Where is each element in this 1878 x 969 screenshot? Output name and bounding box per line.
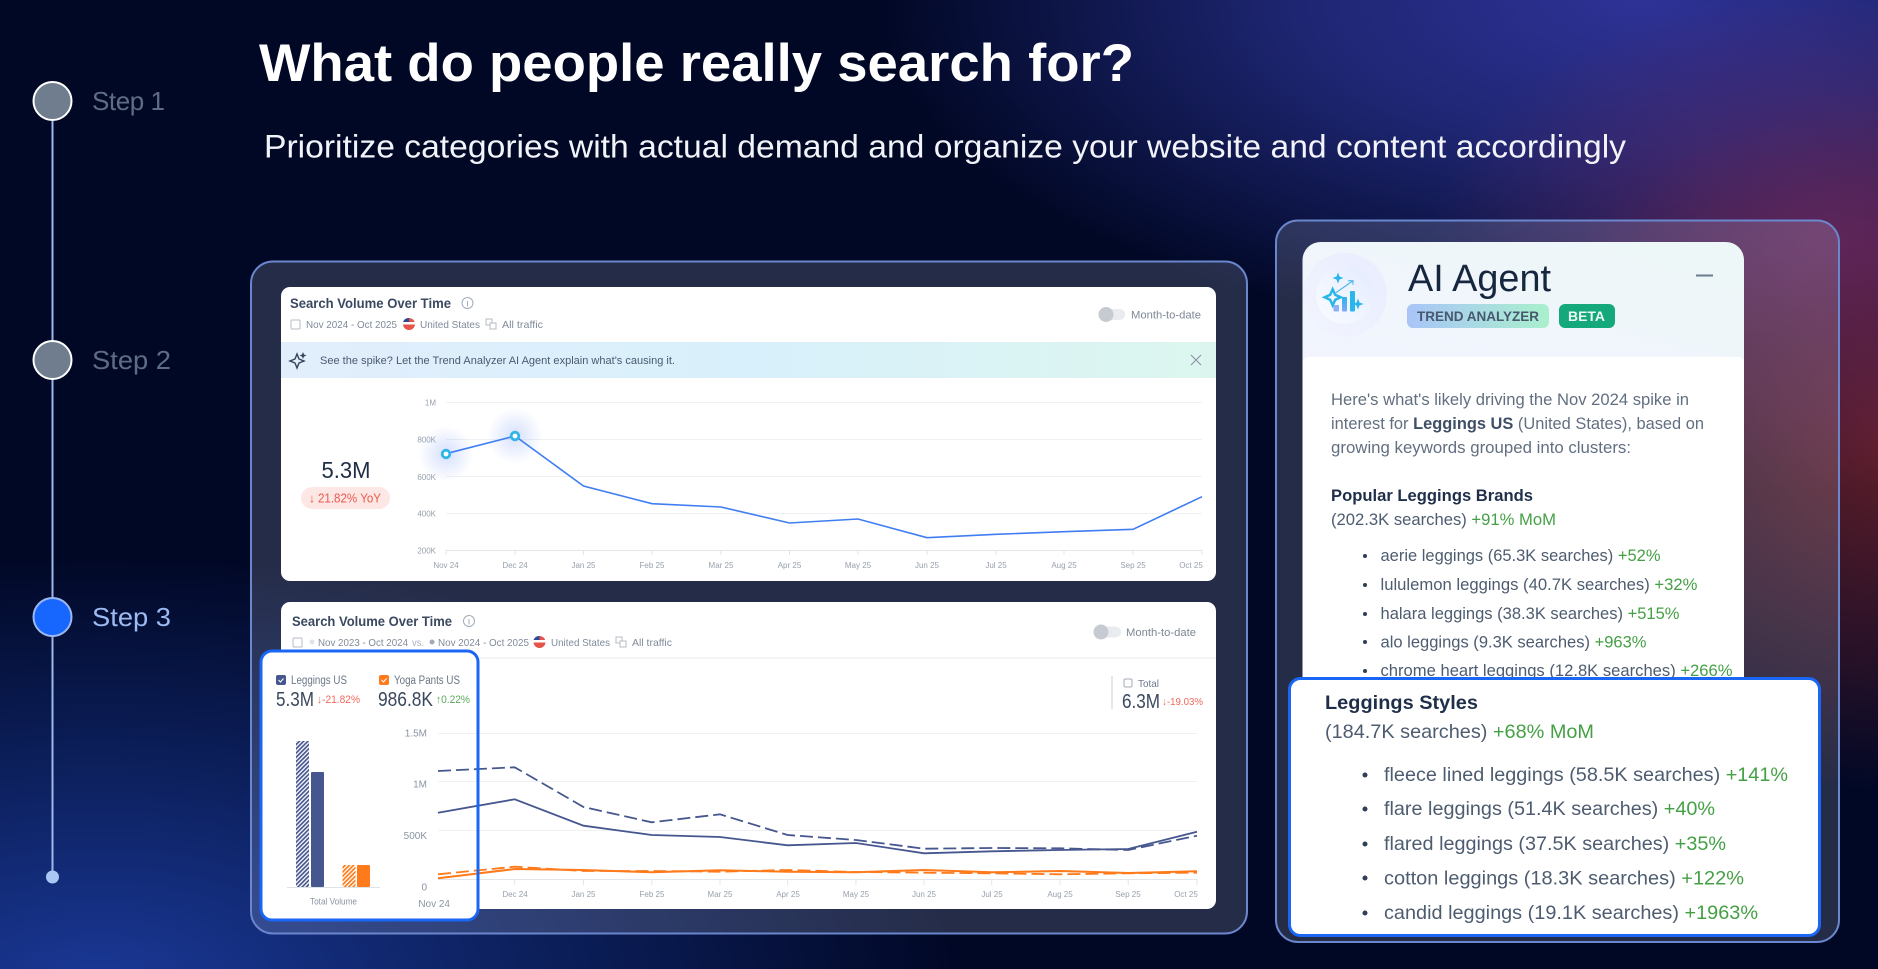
- card heading: Search Volume Over Time: [292, 614, 452, 629]
- y axis labels: 500K: [404, 831, 427, 842]
- line chart: comparison: [438, 734, 1197, 880]
- bar chart: total volume: [287, 741, 380, 908]
- legend: total: 6.3M: [1122, 691, 1160, 713]
- legend: leggings US: [276, 675, 360, 711]
- card heading: Search Volume Over Time: [290, 296, 451, 311]
- legend: leggings US: Leggings US: [291, 675, 347, 687]
- legend: total: Total: [1138, 678, 1159, 690]
- line chart: search volume: Aug 25: [1051, 561, 1077, 570]
- line chart: search volume: Dec 24: [502, 561, 528, 570]
- line chart: search volume: Oct 25: [1179, 561, 1203, 570]
- step 3 (active): [34, 598, 171, 636]
- meta row: [293, 636, 672, 649]
- panel: AI agent: [1276, 220, 1839, 942]
- banner: trend analyzer prompt: See the spike? Let the Trend Analyzer AI Agent explain what's causing it.: [320, 355, 675, 367]
- x axis labels: Jan 25: [571, 890, 596, 899]
- meta row: All traffic: [502, 319, 543, 331]
- meta row: All traffic: [632, 637, 672, 649]
- intro text: [1331, 391, 1704, 457]
- x axis labels: Oct 25: [1174, 890, 1198, 899]
- line chart: search volume: Apr 25: [778, 561, 802, 570]
- line chart: search volume: Jan 25: [571, 561, 596, 570]
- x axis labels: Sep 25: [1115, 890, 1141, 899]
- callout: legend and total volume bars: [260, 650, 480, 922]
- toggle: month-to-date: Month-to-date: [1126, 627, 1196, 639]
- callout keyword list: cotton leggings (18.3K searches) +122%: [1384, 868, 1744, 890]
- icon: info: [462, 298, 473, 308]
- legend: yoga pants US: Yoga Pants US: [394, 675, 460, 687]
- metric: total volume: 5.3M: [322, 457, 370, 483]
- line chart: search volume: 1M: [425, 398, 436, 408]
- meta row: Nov 2024 - Oct 2025: [438, 637, 529, 649]
- meta row: United States: [420, 319, 480, 331]
- y axis labels: 0: [421, 882, 427, 894]
- card: single-trend chart: [281, 287, 1216, 581]
- line chart: search volume: Feb 25: [640, 561, 665, 570]
- badge: trend analyzer: TREND ANALYZER: [1417, 308, 1539, 324]
- x axis labels: Feb 25: [640, 890, 665, 899]
- section: popular leggings brands: lululemon leggings (40.7K searches) +32%: [1380, 576, 1698, 594]
- line chart: search volume: 800K: [417, 436, 437, 444]
- y axis labels: Nov 24: [418, 899, 450, 910]
- toggle: month-to-date: [1094, 624, 1196, 640]
- callout keyword list: flare leggings (51.4K searches) +40%: [1384, 798, 1715, 820]
- legend: yoga pants US: [378, 675, 470, 711]
- line chart: search volume: Jul 25: [985, 561, 1007, 570]
- line chart: search volume: Jun 25: [915, 561, 940, 570]
- x axis labels: Mar 25: [708, 890, 733, 899]
- x axis labels: Jul 25: [981, 890, 1003, 899]
- line chart: search volume: May 25: [845, 561, 872, 570]
- callout summary: (184.7K searches) +68% MoM: [1325, 721, 1594, 743]
- x axis labels: May 25: [843, 890, 870, 899]
- legend: total: ↓-19.03%: [1162, 696, 1203, 708]
- callout heading: Leggings Styles: [1325, 692, 1478, 714]
- legend: yoga pants US: ↑0.22%: [436, 694, 470, 706]
- step 1: [34, 82, 165, 120]
- icon: info: [464, 616, 474, 626]
- panel: search volume charts: [251, 262, 1247, 934]
- intro text: interest for Leggings US (United States), based on: [1331, 415, 1704, 433]
- banner: trend analyzer prompt: [281, 342, 1216, 378]
- line chart: search volume: 400K: [417, 510, 437, 518]
- legend: yoga pants US: 986.8K: [378, 689, 434, 711]
- line chart: search volume: Nov 24: [433, 561, 459, 570]
- metric: total volume: ↓ 21.82% YoY: [309, 492, 382, 506]
- section: popular leggings brands: (202.3K searches) +91% MoM: [1331, 511, 1556, 529]
- step 2: Step 2: [92, 345, 171, 375]
- section: popular leggings brands: aerie leggings (65.3K searches) +52%: [1380, 547, 1661, 565]
- intro text: growing keywords grouped into clusters:: [1331, 439, 1631, 457]
- card: AI agent response: [1302, 242, 1744, 700]
- badge: trend analyzer: [1407, 304, 1549, 328]
- line chart: search volume: 600K: [417, 473, 437, 482]
- callout keyword list: [1362, 764, 1788, 924]
- line chart: search volume: [417, 398, 1203, 570]
- intro text: Here's what's likely driving the Nov 2024 spike in: [1331, 391, 1689, 409]
- bar chart: total volume: Total Volume: [310, 896, 357, 908]
- section: popular leggings brands: [1331, 487, 1733, 680]
- timeline end dot: [46, 870, 59, 884]
- x axis labels: Aug 25: [1047, 890, 1073, 899]
- line chart: search volume: Mar 25: [709, 561, 734, 570]
- step 2: [34, 341, 171, 379]
- badge: beta: BETA: [1568, 308, 1605, 324]
- badge: beta: [1559, 304, 1615, 328]
- callout keyword list: flared leggings (37.5K searches) +35%: [1384, 833, 1726, 855]
- meta row: Nov 2024 - Oct 2025: [306, 319, 397, 331]
- step timeline: [34, 82, 171, 884]
- y axis labels: 1.5M: [405, 728, 427, 740]
- metric: total volume: [301, 457, 390, 509]
- subtitle: Prioritize categories with actual demand and organize your website and content accordingly: [264, 128, 1626, 164]
- card: comparison chart: [281, 602, 1216, 909]
- step 3 (active): Step 3: [92, 602, 171, 632]
- y axis labels: 1M: [413, 780, 427, 790]
- legend: leggings US: ↓-21.82%: [317, 694, 360, 706]
- x axis labels: Dec 24: [502, 890, 528, 899]
- callout keyword list: fleece lined leggings (58.5K searches) +141%: [1384, 764, 1788, 786]
- legend: leggings US: 5.3M: [276, 689, 314, 711]
- toggle: month-to-date: [1098, 307, 1201, 322]
- meta row: Nov 2023 - Oct 2024: [318, 637, 408, 649]
- y axis labels: [404, 728, 450, 910]
- x axis labels: Jun 25: [912, 890, 937, 899]
- line chart: search volume: 200K: [417, 546, 437, 556]
- meta row: vs.: [412, 637, 424, 649]
- x axis labels: Apr 25: [776, 890, 800, 899]
- x axis labels: [502, 879, 1198, 899]
- icon: AI agent logo: [1316, 266, 1374, 324]
- icon: minimize: [1696, 274, 1713, 276]
- step 1: Step 1: [92, 86, 165, 116]
- meta row: United States: [551, 637, 610, 649]
- section: popular leggings brands: Popular Leggings Brands: [1331, 487, 1533, 505]
- legend: total: [1112, 676, 1203, 713]
- heading: page title: What do people really search for?: [259, 34, 1134, 93]
- section: popular leggings brands: chrome heart leggings (12.8K searches) +266%: [1380, 662, 1733, 680]
- line chart: search volume: Sep 25: [1120, 561, 1146, 570]
- heading: AI Agent: AI Agent: [1408, 258, 1551, 300]
- callout: leggings styles: [1290, 678, 1820, 936]
- section: popular leggings brands: alo leggings (9.3K searches) +963%: [1380, 634, 1647, 652]
- section: popular leggings brands: halara leggings (38.3K searches) +515%: [1380, 605, 1680, 623]
- toggle: month-to-date: Month-to-date: [1131, 310, 1201, 322]
- callout keyword list: candid leggings (19.1K searches) +1963%: [1384, 902, 1758, 924]
- meta row: [291, 318, 543, 331]
